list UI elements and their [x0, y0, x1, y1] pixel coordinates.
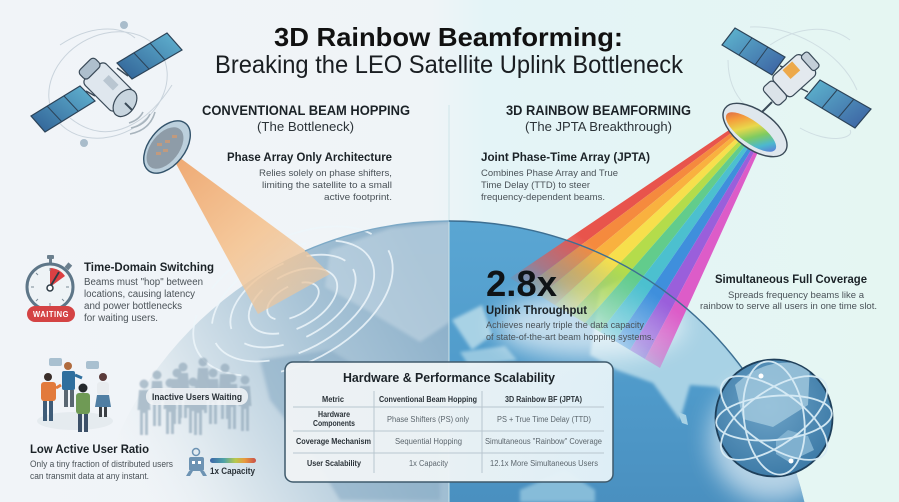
switching text: Time-Domain Switching [84, 260, 214, 274]
orbit lines [728, 27, 857, 138]
left satellite [29, 11, 200, 182]
row: hardware components: Hardware [318, 410, 350, 419]
JPTA text block: Combines Phase Array and True [481, 168, 618, 179]
JPTA text block: Time Delay (TTD) to steer [481, 180, 590, 191]
table header row: Conventional Beam Hopping [379, 395, 477, 404]
JPTA text block [481, 152, 650, 203]
switching text: locations, causing latency [84, 289, 195, 300]
switching text [84, 260, 214, 324]
right column heading [506, 103, 691, 134]
globe outline right [449, 221, 745, 372]
phase array text block [227, 152, 392, 203]
row: coverage mechanism: Simultaneous "Rainbow" Coverage [485, 437, 603, 446]
row: hardware components: Components [313, 419, 355, 428]
switching text: and power bottlenecks [84, 301, 182, 312]
JPTA text block: Joint Phase-Time Array (JPTA) [481, 152, 650, 164]
rainbow dish [714, 93, 796, 167]
ground shadows [37, 412, 113, 430]
inactive users label: Inactive Users Waiting [152, 392, 242, 403]
phase array text block: Phase Array Only Architecture [227, 152, 392, 164]
throughput stat [486, 263, 654, 343]
right column heading: (The JPTA Breakthrough) [525, 119, 672, 134]
throughput stat: Uplink Throughput [486, 303, 587, 317]
table header row: Metric [322, 395, 345, 404]
orbit lines [29, 11, 187, 159]
table header row [322, 395, 582, 404]
phase array text block: Relies solely on phase shifters, [259, 168, 392, 179]
centre divider [448, 105, 450, 502]
inactive users label [146, 388, 248, 405]
icon: ground terminal [186, 448, 207, 476]
performance table panel [285, 362, 613, 482]
row: coverage mechanism: Sequential Hopping [395, 437, 462, 446]
right satellite [714, 27, 871, 167]
low active user ratio text: Low Active User Ratio [30, 442, 149, 456]
row: user scalability [307, 459, 598, 468]
icon: stopwatch [27, 255, 75, 322]
inactive users crowd [138, 358, 252, 435]
waiting badge [27, 306, 75, 322]
simultaneous full coverage text: rainbow to serve all users in one time slot. [700, 301, 877, 312]
switching text: Beams must "hop" between [84, 277, 203, 288]
globe coverage rings [192, 231, 394, 376]
row: user scalability: 1x Capacity [409, 459, 448, 468]
phased array dish [134, 112, 200, 182]
person: blue jacket [62, 362, 82, 407]
body [760, 48, 823, 108]
person: skirt [95, 373, 111, 417]
orange conventional beam [168, 149, 330, 314]
body [75, 54, 134, 113]
table title: Hardware & Performance Scalability [343, 370, 556, 385]
JPTA text block: frequency-dependent beams. [481, 192, 605, 203]
person: green shirt [76, 384, 90, 432]
row: hardware components [313, 410, 591, 428]
left column heading: CONVENTIONAL BEAM HOPPING [202, 103, 410, 118]
solar panels [117, 33, 182, 79]
low active user ratio text [30, 442, 173, 481]
big number: 2.8x [486, 263, 557, 304]
simultaneous full coverage text: Spreads frequency beams like a [728, 290, 865, 301]
phase array text block: active footprint. [324, 192, 392, 203]
active users group [37, 358, 113, 432]
rainbow beam [510, 128, 758, 368]
simultaneous full coverage text [700, 272, 877, 312]
person: orange jacket [41, 373, 61, 421]
row: user scalability: User Scalability [307, 459, 361, 468]
row: coverage mechanism [296, 437, 603, 446]
signal waves [129, 112, 155, 134]
row: hardware components: Phase Shifters (PS) only [387, 415, 469, 424]
time-domain switching [27, 255, 214, 324]
capacity indicator [186, 448, 256, 477]
main title: 3D Rainbow Beamforming: [274, 22, 623, 52]
left column heading: (The Bottleneck) [257, 119, 354, 134]
phase array text block: limiting the satellite to a small [262, 180, 392, 191]
capacity bar [210, 458, 256, 463]
globe [146, 222, 804, 502]
globe left half: conventional side [146, 222, 449, 502]
switching text: for waiting users. [84, 313, 158, 324]
globe right half: rainbow side [449, 221, 834, 502]
title [215, 22, 683, 79]
right column heading: 3D RAINBOW BEAMFORMING [506, 103, 691, 118]
row: coverage mechanism: Coverage Mechanism [296, 437, 371, 446]
throughput stat: Achieves nearly triple the data capacity [486, 320, 644, 331]
solar panels [722, 28, 785, 75]
subtitle: Breaking the LEO Satellite Uplink Bottleneck [215, 51, 683, 79]
simultaneous full coverage text: Simultaneous Full Coverage [715, 272, 867, 286]
low active user ratio text: can transmit data at any instant. [30, 471, 149, 481]
table header row: 3D Rainbow BF (JPTA) [505, 395, 582, 404]
low active user ratio text: Only a tiny fraction of distributed users [30, 459, 173, 469]
speech bubbles [49, 358, 62, 366]
row: user scalability: 12.1x More Simultaneous Users [490, 459, 598, 468]
row: hardware components: PS + True Time Delay (TTD) [497, 415, 591, 424]
icon: small orbit globe [714, 358, 834, 478]
icon: stopwatch: WAITING [33, 309, 69, 319]
left column heading [202, 103, 410, 134]
capacity indicator: 1x Capacity [210, 466, 256, 477]
throughput stat: of state-of-the-art beam hopping systems. [486, 332, 654, 343]
panel background [285, 362, 613, 482]
